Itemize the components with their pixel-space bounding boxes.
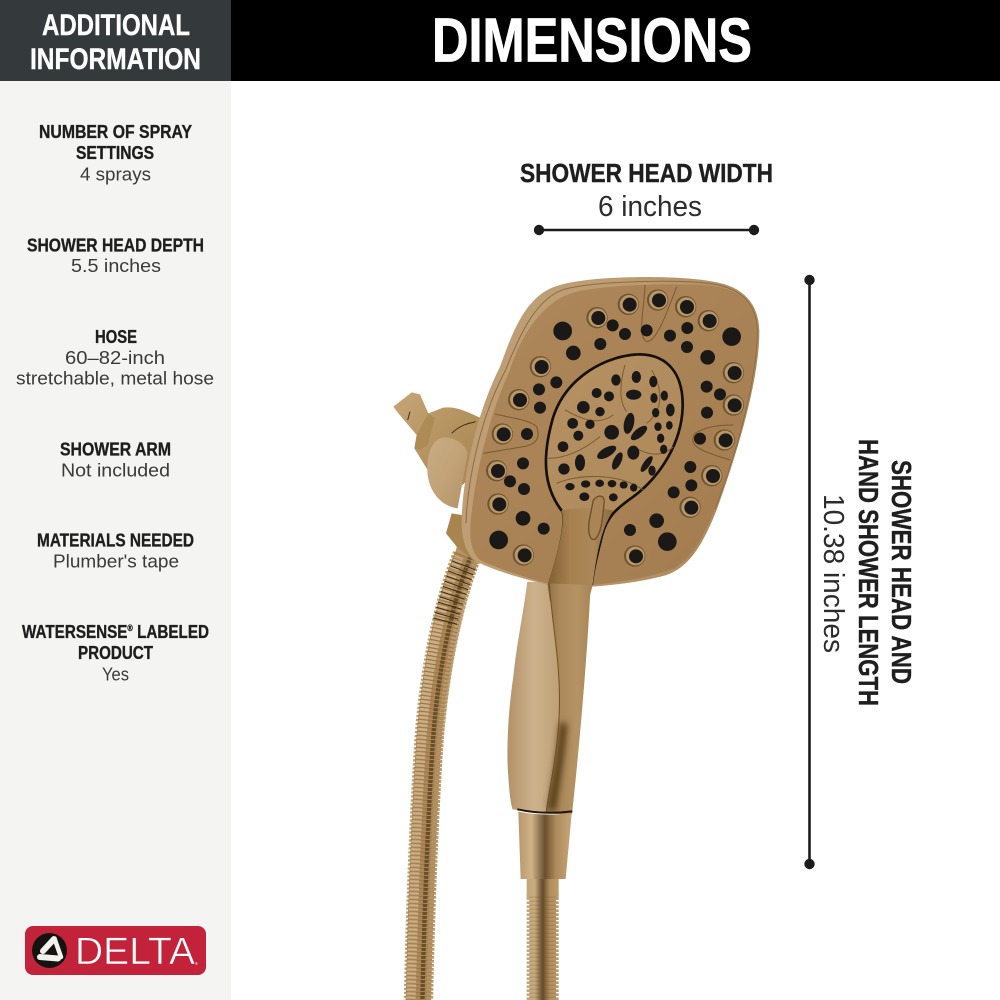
hose: left flexible hose: [411, 550, 479, 1000]
hose: lower centre hose: [527, 878, 559, 1000]
handle: neck and dark grip: [546, 508, 613, 814]
icon: spray lever: [589, 496, 604, 539]
header: additional information: [0, 0, 231, 81]
illustration: shower head product: [393, 277, 759, 1000]
text block: shower arm: Not included: [61, 460, 170, 480]
text block: watersense labeled product: LABELED: [133, 621, 209, 642]
text block: number of spray settings: NUMBER OF SPRAY: [39, 121, 193, 142]
text block: number of spray settings: SETTINGS: [76, 142, 154, 163]
disc: inner spray face: [546, 354, 683, 585]
text block: watersense labeled product: [22, 621, 209, 684]
nozzles: outer ringed: [486, 289, 744, 567]
logo: delta: DELTA: [75, 931, 196, 973]
header: dimensions title: [231, 0, 1000, 81]
text block: hose: stretchable, metal hose: [16, 368, 214, 388]
text block: hose: 60–82-inch: [65, 348, 165, 368]
text block: number of spray settings: 4 sprays: [80, 164, 151, 184]
logo: delta: [25, 926, 206, 975]
text block: shower head depth: [27, 234, 204, 276]
logo: delta: ®: [195, 961, 198, 966]
text block: watersense labeled product: ®: [127, 623, 133, 633]
text block: shower head depth: 5.5 inches: [71, 256, 161, 276]
dimension: shower head and hand shower length: 10.38 inches: [817, 494, 849, 653]
nozzles: inner spray face: [558, 371, 675, 501]
text block: materials needed: Plumber's tape: [53, 552, 179, 572]
panel: sidebar background: [0, 81, 231, 1000]
collar: handle base with ring: [517, 809, 572, 879]
text block: materials needed: MATERIALS NEEDED: [37, 530, 194, 550]
header: additional information: INFORMATION: [30, 43, 201, 76]
bracket: arm mount: [393, 392, 483, 560]
text block: watersense labeled product: Yes: [102, 664, 129, 684]
text block: materials needed: [37, 530, 194, 572]
header: additional information: ADDITIONAL: [42, 9, 190, 42]
nozzles: outer solid: [489, 319, 741, 551]
text block: watersense labeled product: PRODUCT: [78, 642, 154, 663]
dimension: shower head width: SHOWER HEAD WIDTH: [520, 160, 773, 188]
text block: hose: HOSE: [95, 326, 137, 347]
text block: shower arm: SHOWER ARM: [60, 438, 171, 460]
panel: shower head face: [462, 277, 759, 587]
dimension: shower head width: [520, 160, 773, 235]
dimension: shower head and hand shower length: SHOWER HEAD AND: [886, 460, 917, 684]
text block: number of spray settings: [39, 121, 193, 184]
text block: shower arm: [60, 438, 171, 480]
dimension: shower head and hand shower length: [804, 275, 917, 869]
text block: hose: [16, 326, 214, 388]
handle: light grip: [507, 582, 567, 815]
header: dimensions title: DIMENSIONS: [432, 6, 752, 76]
dimension: shower head width: 6 inches: [598, 191, 702, 223]
dimension: shower head and hand shower length: HAND SHOWER LENGTH: [853, 439, 884, 706]
text block: watersense labeled product: WATERSENSE: [22, 621, 150, 642]
text block: shower head depth: SHOWER HEAD DEPTH: [27, 234, 204, 256]
